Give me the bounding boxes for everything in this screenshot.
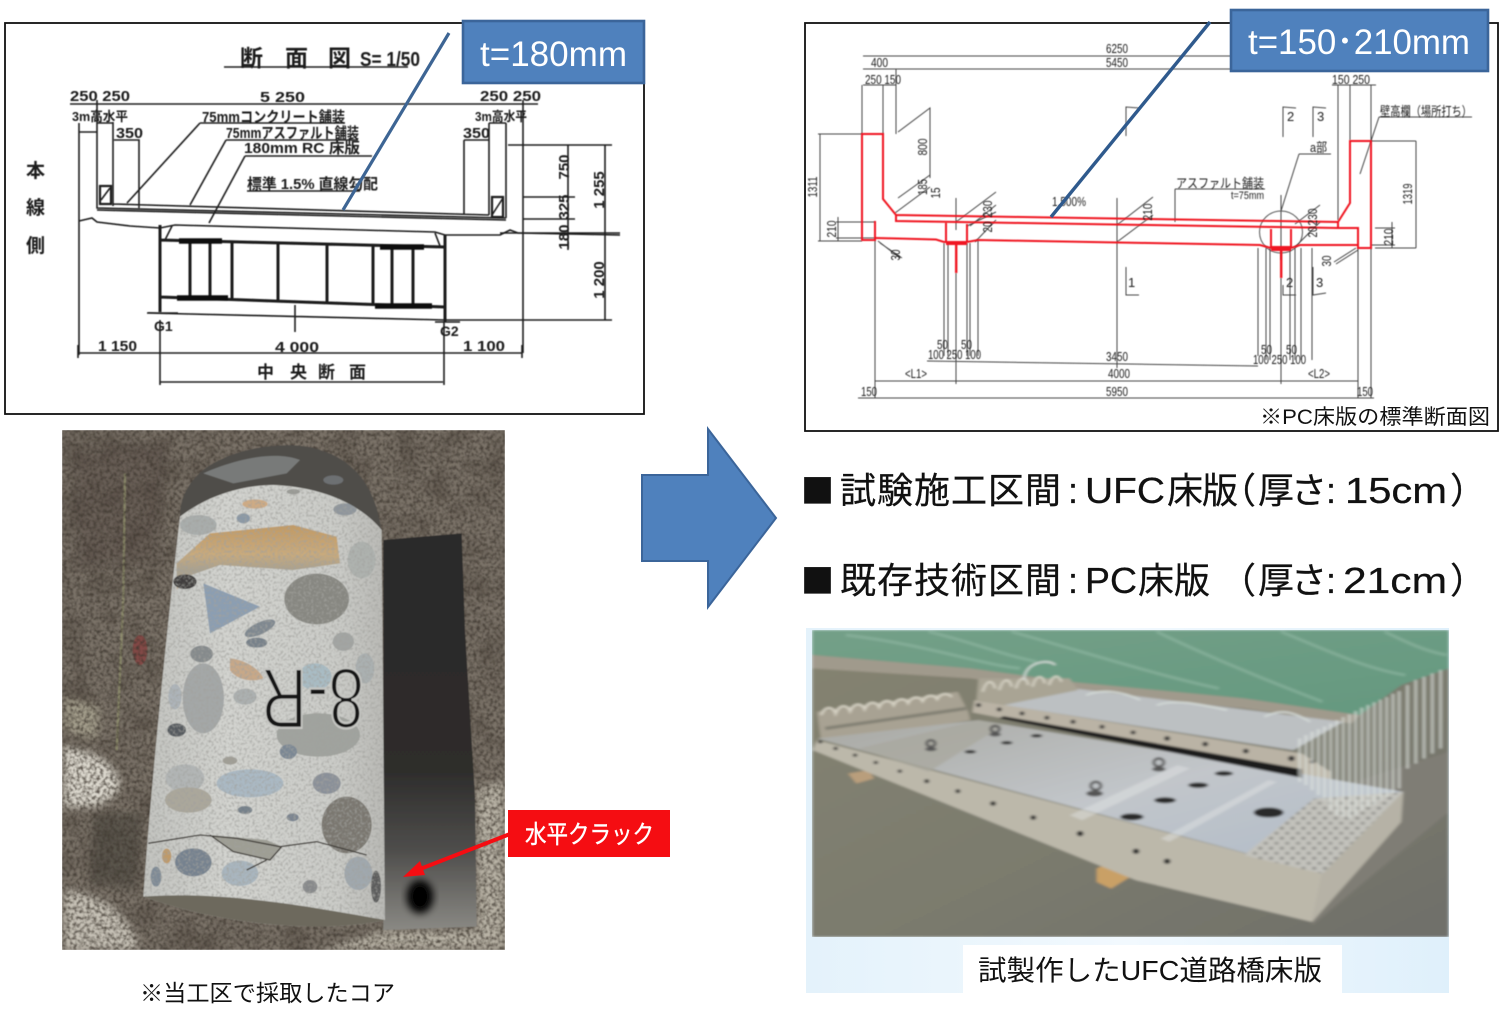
drawing linework: RC section bbox=[26, 45, 620, 385]
drawing labels: RC section bbox=[26, 45, 608, 382]
dimension labels: 20 bbox=[980, 222, 995, 232]
dimension labels: 5450 bbox=[1106, 55, 1128, 70]
text: test section UFC: 15cm bbox=[1345, 470, 1447, 511]
dimension labels: 30 bbox=[888, 250, 903, 260]
text: existing tech section PC: ■ bbox=[801, 555, 834, 603]
text: test section UFC: UFC bbox=[1085, 470, 1165, 511]
dimension labels: 5950 bbox=[1106, 384, 1128, 399]
drawing labels: RC section: 5 250 bbox=[260, 89, 305, 106]
drawing labels: RC section: 断面図 bbox=[240, 45, 351, 71]
drawing labels: RC section: 180 bbox=[556, 224, 573, 250]
drawing labels: RC section: 75mmコンクリート舗装 bbox=[202, 109, 345, 126]
dimension labels: 1311 bbox=[805, 176, 820, 198]
shadow of core bbox=[383, 533, 477, 930]
dimension labels: 185 bbox=[915, 179, 930, 195]
dimension labels: 20 bbox=[1305, 226, 1320, 238]
dimension labels: 3 bbox=[1316, 275, 1323, 290]
lifting eye bolts bbox=[927, 726, 1164, 790]
dimension labels: 100 250 100 bbox=[928, 347, 981, 362]
drawing labels: RC section: G2 bbox=[440, 323, 459, 339]
text: test section UFC: （ bbox=[1220, 462, 1256, 514]
text: existing tech section PC: 21cm bbox=[1343, 560, 1447, 601]
drawing labels: RC section: 75mmアスファルト舗装 bbox=[226, 125, 359, 142]
photo: core sample bbox=[62, 430, 505, 950]
rear slab bbox=[1003, 688, 1343, 750]
dimension labels: 壁高欄（場所打ち） bbox=[1380, 104, 1472, 119]
caption: PC deck standard section: ※PC床版の標準断面図 bbox=[1260, 406, 1490, 429]
text: existing tech section PC: 既存技術区間 bbox=[840, 552, 1061, 604]
drawing labels: RC section: 1 100 bbox=[463, 338, 505, 355]
text: existing tech section PC: : bbox=[1326, 560, 1336, 601]
panel: UFC deck photo with caption bbox=[806, 628, 1449, 993]
leader line: deck thickness right bbox=[1051, 22, 1210, 217]
dimension labels: 3 bbox=[1317, 109, 1324, 124]
asphalt cap bbox=[180, 445, 382, 533]
caption: trial UFC deck: 試製作したUFC道路橋床版 bbox=[978, 955, 1322, 986]
dimension labels: 230 bbox=[1305, 208, 1320, 226]
text: existing tech section PC: （ bbox=[1220, 552, 1256, 604]
drawing labels: RC section: 350 bbox=[463, 125, 490, 142]
text: existing tech section PC: : bbox=[1068, 560, 1078, 601]
panel: PC deck section drawing bbox=[805, 23, 1498, 431]
dimension labels: 150 bbox=[1357, 384, 1373, 399]
label: t=150・210mm: t=150･210mm bbox=[1248, 23, 1470, 62]
dimension labels: 3450 bbox=[1106, 349, 1128, 364]
callout: horizontal crack: 水平クラック bbox=[525, 821, 654, 849]
handwritten core ID: 8-R bbox=[261, 650, 364, 745]
dimension labels: 6250 bbox=[1106, 41, 1128, 56]
drawing labels: RC section: 3m高水平 bbox=[72, 109, 128, 124]
red structural outline bbox=[862, 134, 1371, 278]
drawing labels: RC section: 325 bbox=[556, 194, 573, 220]
drawing labels: RC section: 180mm RC 床版 bbox=[244, 140, 360, 157]
dimension labels: 30 bbox=[1319, 256, 1334, 266]
label: t=180mm bbox=[463, 21, 644, 83]
leader line: deck thickness left bbox=[343, 33, 449, 210]
dimension labels: 210 bbox=[1140, 204, 1155, 220]
drawing labels: RC section: 250 250 bbox=[70, 88, 130, 105]
drawing labels: RC section: 3m高水平 bbox=[475, 109, 527, 124]
left rebar loops bbox=[817, 692, 970, 740]
dimension labels: 50 bbox=[937, 337, 948, 352]
dimension labels: <L2> bbox=[1308, 366, 1330, 381]
text: test section UFC: ■ bbox=[801, 465, 834, 513]
drawing labels: RC section: 350 bbox=[116, 125, 143, 142]
drawing labels: RC section: 1 255 bbox=[591, 171, 608, 209]
arrow: from existing to new bbox=[642, 429, 776, 607]
dimension labels: 50 bbox=[1261, 342, 1272, 357]
drawing labels: RC section: 本 bbox=[26, 160, 45, 182]
text: test section UFC: ） bbox=[1450, 462, 1486, 514]
drawing labels: RC section: S= 1/50 bbox=[360, 49, 420, 71]
dimension labels: 1 bbox=[1128, 275, 1135, 290]
dimension labels: 2 bbox=[1286, 275, 1293, 290]
dimension labels: 2 bbox=[1287, 109, 1294, 124]
dimension labels: 50 bbox=[961, 337, 972, 352]
drawing labels: RC section: 側 bbox=[26, 235, 45, 257]
drawing labels: RC section: G1 bbox=[154, 318, 173, 334]
dimension labels: 210 bbox=[1381, 228, 1396, 246]
dimension labels: 50 bbox=[1286, 342, 1297, 357]
core cylinder bbox=[143, 485, 385, 927]
dimension labels: 100 250 100 bbox=[1253, 352, 1306, 367]
dimension labels: 4000 bbox=[1108, 366, 1130, 381]
caption: core sample: ※当工区で採取したコア bbox=[140, 980, 395, 1006]
dimension labels bbox=[805, 41, 1472, 399]
label: t=180mm: t=180mm bbox=[480, 35, 627, 74]
dimension labels: 15 bbox=[928, 188, 943, 198]
drawing labels: RC section: 750 bbox=[556, 154, 573, 180]
gap between slabs bbox=[999, 716, 1302, 778]
drawing labels: RC section: 250 250 bbox=[480, 88, 541, 105]
text: test section UFC: : bbox=[1068, 470, 1078, 511]
label: t=150・210mm bbox=[1231, 10, 1488, 71]
text: test section UFC: : bbox=[1326, 470, 1336, 511]
dimension labels: 150 bbox=[861, 384, 877, 399]
drawing labels: RC section: 1 150 bbox=[98, 338, 137, 355]
dimension labels: アスファルト舗装 bbox=[1176, 176, 1264, 191]
text: existing tech section PC: 床版 bbox=[1138, 552, 1210, 604]
drawing labels: RC section: 中央断面 bbox=[257, 362, 366, 382]
dimension labels: 1.500% bbox=[1052, 194, 1086, 209]
drawing labels: RC section: 1 200 bbox=[591, 261, 608, 299]
dimension labels: t=75mm bbox=[1231, 190, 1264, 202]
dimension labels: 400 bbox=[871, 55, 888, 70]
dimension labels: 250 150 bbox=[865, 72, 901, 87]
drawing labels: RC section: 線 bbox=[26, 197, 45, 219]
dimension labels: 210 bbox=[824, 220, 839, 238]
text: test section UFC: 厚さ bbox=[1258, 462, 1327, 514]
dimension labels: 800 bbox=[915, 138, 930, 156]
front slab top bbox=[818, 720, 1403, 854]
text: test section UFC: 試験施工区間 bbox=[840, 462, 1061, 514]
text: existing tech section PC: PC bbox=[1085, 560, 1137, 601]
panel: existing RC deck section drawing bbox=[5, 23, 644, 414]
caption: trial UFC deck bbox=[963, 945, 1342, 993]
dimension labels: 1319 bbox=[1400, 184, 1415, 204]
text: existing tech section PC: ） bbox=[1450, 552, 1486, 604]
rebar verticals bbox=[1300, 670, 1441, 819]
text: test section UFC: 床版 bbox=[1167, 462, 1238, 514]
photo: trial UFC deck bbox=[812, 630, 1449, 937]
drawing labels: RC section: 標準 1.5% 直線勾配 bbox=[247, 175, 378, 193]
front slab side face bbox=[813, 740, 1322, 922]
callout: horizontal crack bbox=[403, 810, 670, 877]
dimension lines bbox=[818, 56, 1472, 398]
dimension labels: <L1> bbox=[905, 366, 927, 381]
text: existing tech section PC: 厚さ bbox=[1258, 552, 1327, 604]
drawing labels: RC section: 4 000 bbox=[275, 339, 319, 356]
dimension labels: a部 bbox=[1310, 140, 1327, 155]
wood blocks bbox=[1094, 866, 1130, 890]
dimension labels: 230 bbox=[980, 200, 995, 218]
arrow: to crack bbox=[403, 834, 510, 877]
dimension labels: 150 250 bbox=[1332, 72, 1370, 87]
